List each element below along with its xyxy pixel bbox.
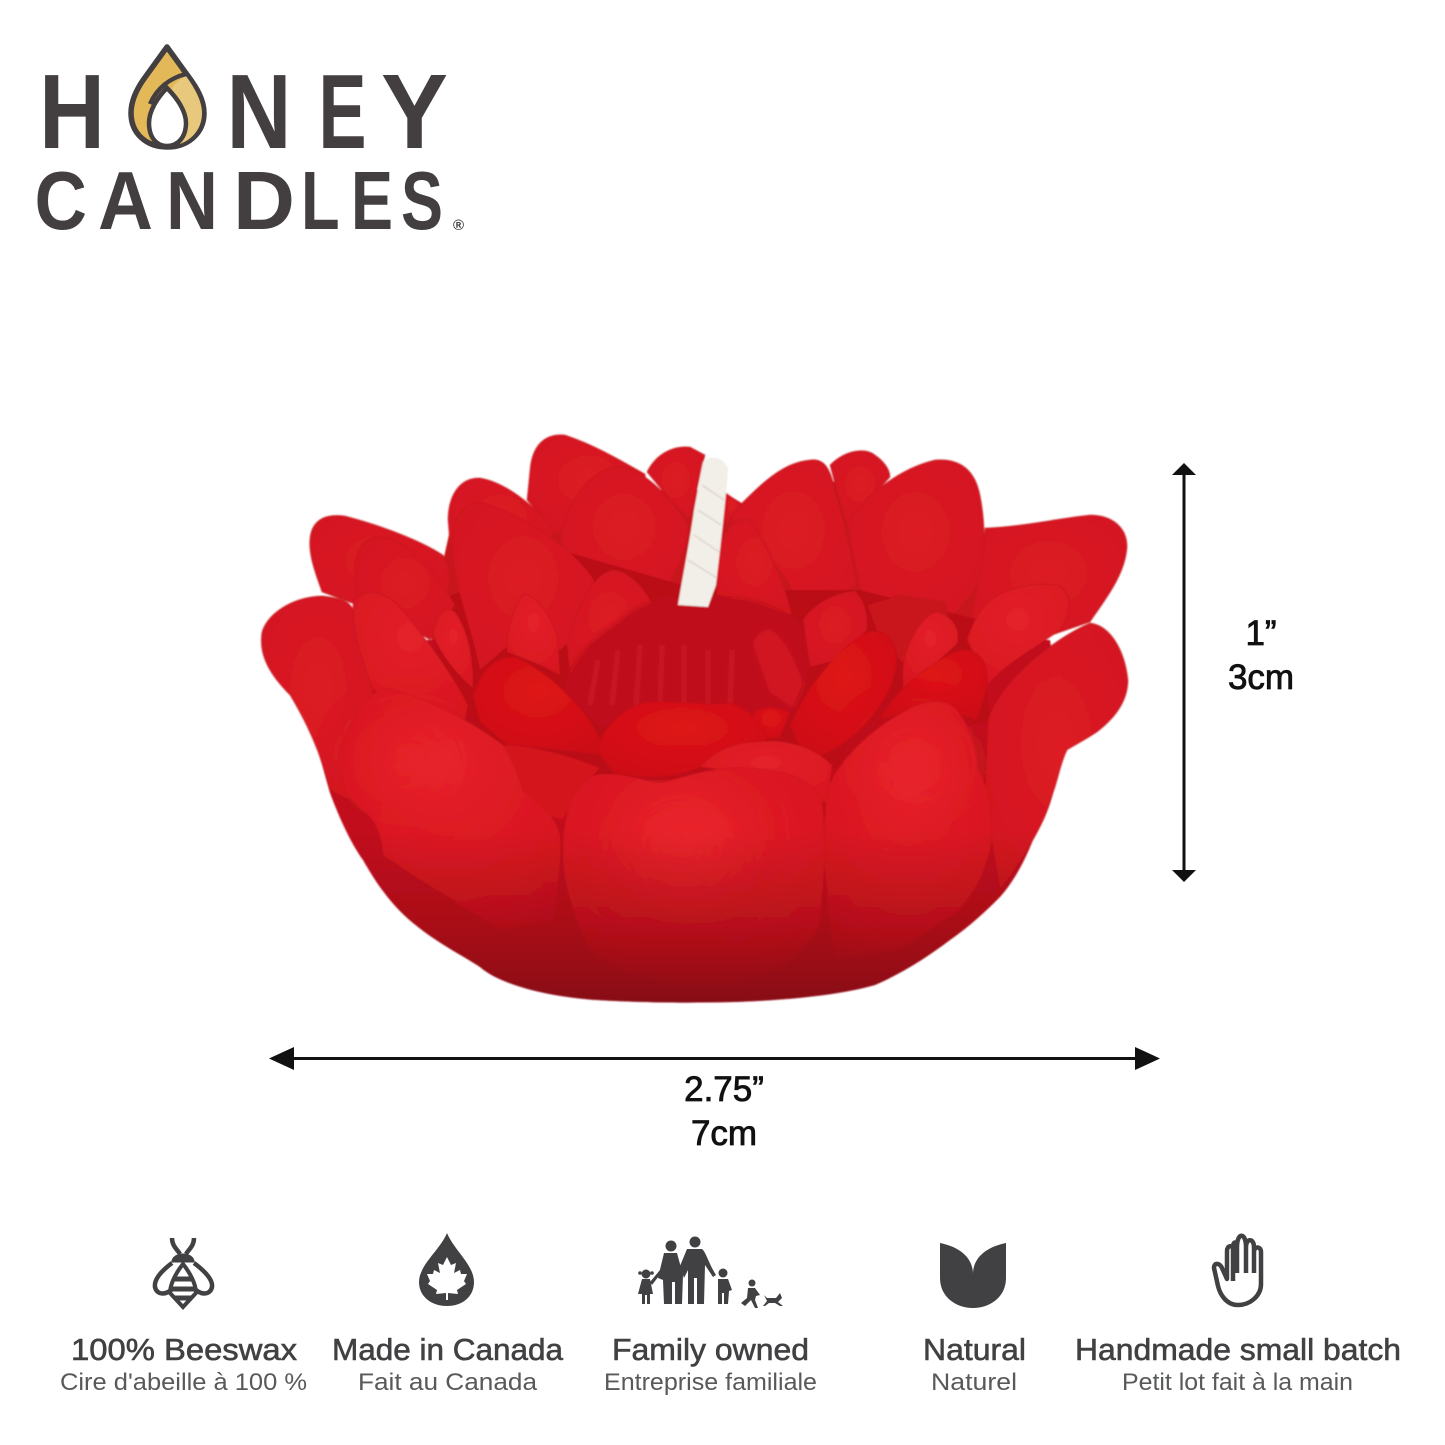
feature: handmade small batch: [1075, 1236, 1401, 1396]
logo word: CANDLES: C: [34, 154, 87, 247]
icon: honey flame: [131, 47, 204, 147]
logo word: CANDLES: L: [301, 154, 340, 247]
icon: drop with maple leaf: [419, 1233, 474, 1306]
icon: tulip leaf: [940, 1243, 1006, 1308]
heading: 100% Beeswax: [71, 1332, 298, 1367]
logo word: CANDLES: [34, 154, 464, 247]
candle body: [300, 640, 1067, 1003]
logo word: HONEY: Y: [381, 53, 448, 171]
inner front petals: [473, 591, 988, 777]
logo word: HONEY: N: [226, 53, 292, 171]
icon: bee: [155, 1238, 212, 1307]
icon: family: [638, 1236, 783, 1308]
logo word: CANDLES: S: [401, 154, 443, 247]
label: width: 7cm: [691, 1114, 757, 1153]
logo word: HONEY: [39, 53, 448, 171]
front petals: [342, 688, 992, 985]
logo word: CANDLES: D: [233, 154, 295, 247]
arrow: width dimension: [269, 1047, 1160, 1070]
logo word: CANDLES: A: [98, 154, 153, 247]
logo word: CANDLES: E: [351, 154, 393, 247]
label: height: 1”: [1245, 614, 1277, 653]
arrow: height dimension: [1172, 463, 1196, 882]
subheading: Cire d'abeille à 100 %: [60, 1369, 307, 1396]
heading: Natural: [923, 1332, 1026, 1367]
feature: natural: [923, 1243, 1026, 1396]
heading: Made in Canada: [332, 1332, 564, 1367]
feature: family owned: [604, 1236, 817, 1396]
feature: made in Canada: [332, 1233, 564, 1396]
subheading: Naturel: [931, 1369, 1017, 1396]
feature: 100% beeswax: [60, 1238, 307, 1396]
inner petals: [353, 519, 1069, 720]
subheading: Petit lot fait à la main: [1122, 1369, 1353, 1396]
heading: Handmade small batch: [1075, 1332, 1401, 1367]
logo word: CANDLES: N: [166, 154, 218, 247]
logo word: HONEY: E: [318, 53, 366, 171]
label: height: 3cm: [1228, 658, 1294, 697]
label: height: [1228, 614, 1294, 697]
wick: [678, 458, 728, 607]
highlights and shadow on base: [280, 722, 1080, 1010]
heading: Family owned: [612, 1332, 809, 1367]
logo: Honey Candles: [34, 47, 464, 247]
icon: hand: [1214, 1236, 1261, 1305]
back fill behind petals: [430, 480, 1000, 650]
logo word: HONEY: H: [39, 53, 105, 171]
logo word: CANDLES: ®: [453, 217, 464, 234]
back petals: [310, 435, 1127, 645]
product photo: red flower candle: [261, 435, 1128, 1010]
label: width: 2.75”: [684, 1070, 764, 1109]
label: width: [684, 1070, 764, 1153]
middle petals: [261, 503, 1128, 890]
subheading: Entreprise familiale: [604, 1369, 817, 1396]
candle centre: [565, 597, 809, 725]
subheading: Fait au Canada: [358, 1369, 538, 1396]
interior shadow: [430, 550, 990, 780]
